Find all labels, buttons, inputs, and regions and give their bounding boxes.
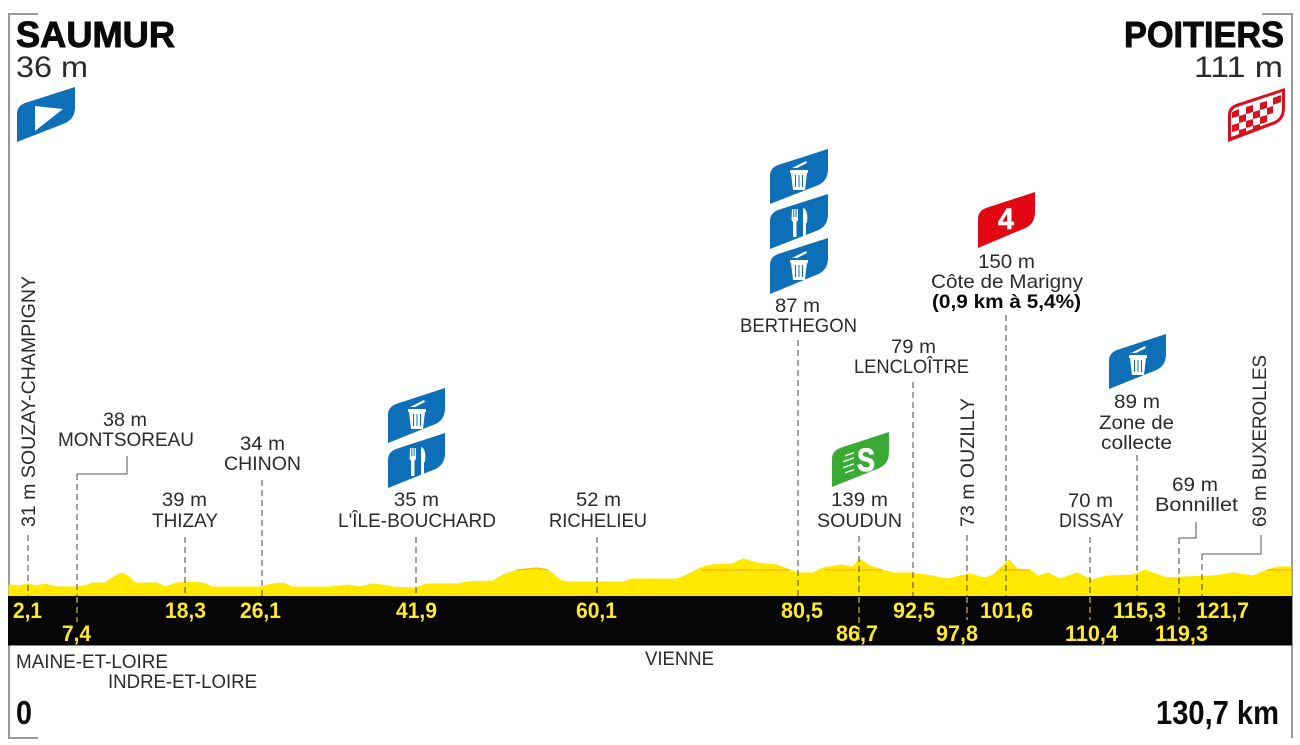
icon: green intermediate sprint: S	[857, 442, 875, 478]
label: collection zone: Zone de	[1099, 412, 1174, 434]
icon: finish checkered flag	[1228, 88, 1285, 142]
kilometre markers: 121,7	[1196, 598, 1249, 623]
department names	[16, 648, 714, 693]
icon: collection zone waste bin	[1109, 334, 1166, 389]
label: collection zone: collecte	[1101, 432, 1172, 454]
start town: Saumur: 36 m	[16, 51, 88, 84]
label: Montsoreau: MONTSOREAU	[58, 429, 194, 451]
distance total: 130,7 km	[1156, 694, 1279, 731]
icon: feed zone waste bin at Berthegon	[770, 149, 828, 204]
finish town: Poitiers	[1124, 14, 1284, 84]
kilometre markers: 18,3	[165, 598, 206, 623]
label: Montsoreau: 38 m	[103, 409, 147, 431]
label: Buxerolles: 69 m BUXEROLLES	[1249, 355, 1271, 527]
finish town: Poitiers: POITIERS	[1124, 14, 1284, 55]
elevation profile	[9, 559, 1291, 596]
label: Bonnillet: Bonnillet	[1155, 494, 1239, 516]
label: Chinon	[224, 433, 301, 475]
label: Thizay: THIZAY	[152, 510, 218, 532]
kilometre markers	[13, 598, 1249, 646]
kilometre markers: 119,3	[1155, 621, 1208, 646]
icon: waste bin at Berthegon	[770, 238, 828, 294]
label: collection zone: 89 m	[1114, 391, 1160, 413]
label: Lencloître: LENCLOÎTRE	[854, 355, 969, 378]
label: Bonnillet: 69 m	[1172, 474, 1218, 496]
kilometre markers: 60,1	[576, 598, 617, 623]
black kilometre band	[8, 596, 1292, 646]
kilometre markers: 26,1	[240, 598, 281, 623]
label: Souzay-Champigny: 31 m SOUZAY-CHAMPIGNY	[18, 276, 40, 527]
start town: Saumur: SAUMUR	[16, 14, 175, 55]
department names: INDRE-ET-LOIRE	[108, 671, 257, 693]
label: Soudun	[817, 489, 902, 532]
icon: cutlery at L'Île-Bouchard	[388, 433, 445, 488]
start town: Saumur	[16, 14, 175, 84]
kilometre markers: 41,9	[396, 598, 437, 623]
label: Berthegon	[740, 295, 857, 337]
kilometre markers: 101,6	[980, 598, 1033, 623]
icon: green intermediate sprint	[832, 432, 889, 487]
kilometre markers: 92,5	[893, 598, 935, 623]
label: Lencloître: 79 m	[891, 336, 936, 358]
icon: start flag	[17, 87, 75, 142]
label: Montsoreau	[58, 409, 194, 451]
label: Thizay: 39 m	[162, 489, 207, 511]
label: Berthegon: 87 m	[775, 295, 820, 317]
label: L'Île-Bouchard	[338, 489, 496, 532]
label: L'Île-Bouchard: L'ÎLE-BOUCHARD	[338, 509, 496, 532]
label: Ouzilly: 73 m OUZILLY	[957, 398, 979, 527]
icon: waste bin at L'Île-Bouchard	[388, 388, 445, 443]
department names: MAINE-ET-LOIRE	[16, 651, 168, 673]
label: Soudun: SOUDUN	[817, 510, 902, 532]
kilometre markers: 97,8	[936, 621, 978, 646]
kilometre markers: 80,5	[781, 598, 823, 623]
label: Lencloître	[854, 336, 969, 378]
label: Dissay: DISSAY	[1059, 510, 1124, 532]
label: Côte de Marigny climb	[931, 251, 1083, 313]
icon: red category 4 climb: 4	[998, 203, 1014, 236]
distance start: 0	[16, 694, 32, 731]
kilometre markers: 110,4	[1065, 621, 1119, 646]
label: Côte de Marigny climb: (0,9 km à 5,4%)	[932, 291, 1081, 313]
label: Richelieu	[549, 489, 647, 532]
label: L'Île-Bouchard: 35 m	[394, 489, 439, 511]
kilometre markers: 7,4	[62, 621, 92, 646]
route markers	[28, 315, 1261, 640]
department names: VIENNE	[645, 648, 714, 670]
label: Richelieu: RICHELIEU	[549, 510, 647, 532]
label: Côte de Marigny climb: Côte de Marigny	[931, 271, 1083, 293]
label: Dissay: 70 m	[1068, 490, 1113, 512]
kilometre markers: 115,3	[1113, 598, 1166, 623]
kilometre markers: 2,1	[13, 598, 42, 623]
label: Chinon: CHINON	[224, 453, 301, 475]
finish town: Poitiers: 111 m	[1194, 51, 1283, 84]
label: Richelieu: 52 m	[576, 489, 621, 511]
kilometre markers: 86,7	[836, 621, 878, 646]
label: collection zone	[1099, 391, 1174, 454]
label: Côte de Marigny climb: 150 m	[978, 251, 1035, 273]
label: Dissay	[1059, 490, 1124, 532]
label: Chinon: 34 m	[240, 433, 285, 455]
label: Thizay	[152, 489, 218, 532]
label: Berthegon: BERTHEGON	[740, 315, 857, 337]
icon: red category 4 climb	[978, 192, 1035, 248]
label: Soudun: 139 m	[831, 489, 888, 511]
label: Bonnillet	[1155, 474, 1239, 516]
icon: feed zone cutlery at Berthegon	[770, 194, 828, 249]
